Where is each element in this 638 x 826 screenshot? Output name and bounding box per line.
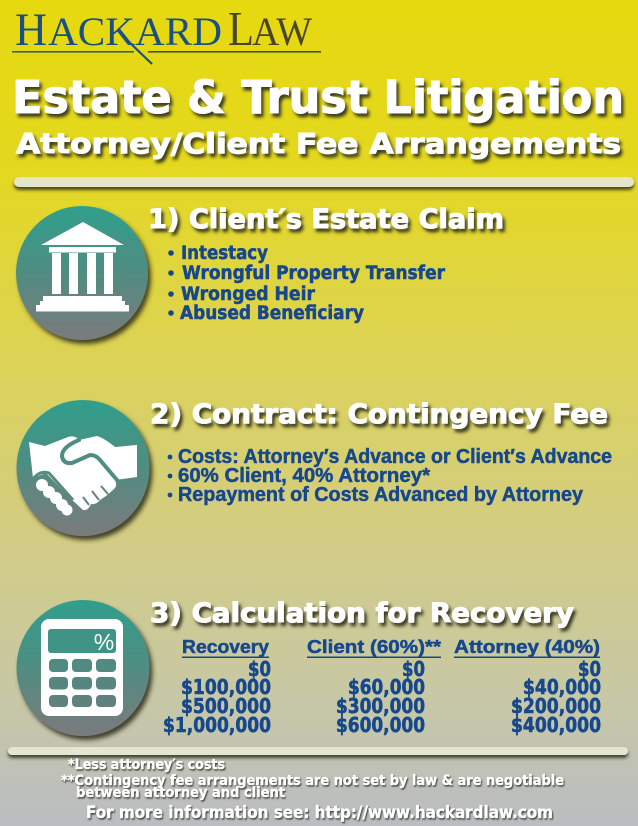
table: recovery column: $0: [248, 657, 271, 681]
table: attorney column: $400,000: [511, 713, 601, 737]
bullet list 2: [168, 446, 612, 506]
table: client column: $600,000: [336, 713, 425, 737]
table: recovery column: $500,000: [181, 694, 271, 718]
section 1: client's estate claim: [16, 204, 504, 340]
bullet list 2: 60% Client, 40% Attorney*: [178, 465, 430, 487]
table: client column: $60,000: [348, 675, 425, 699]
bullet list 1: Abused Beneficiary: [180, 303, 364, 324]
logo: Hackard Law: H: [15, 4, 47, 56]
bullet list 1: Intestacy: [181, 243, 268, 264]
table: recovery column: Recovery: [182, 636, 270, 657]
subtitle: Attorney/Client Fee Arrangements: [16, 127, 621, 160]
table: recovery column: $100,000: [181, 675, 271, 699]
table: attorney column: [454, 636, 601, 737]
footnotes: *Less attorney′s costs: [68, 757, 225, 773]
icon: calculator: %: [94, 629, 114, 655]
table: client column: $0: [402, 657, 425, 681]
table: recovery column: [163, 636, 271, 737]
icon: courthouse: [16, 206, 148, 340]
table: attorney column: $200,000: [511, 694, 601, 718]
title: Estate & Trust Litigation: [12, 71, 624, 124]
icon: handshake: [16, 400, 150, 536]
logo: Hackard Law: L: [228, 1, 254, 56]
top divider bar: [14, 177, 634, 187]
table: attorney column: Attorney (40%): [454, 636, 600, 657]
table: attorney column: $0: [578, 657, 601, 681]
logo: Hackard Law: ACKARD: [48, 9, 222, 54]
bullet list 2: Costs: Attorney′s Advance or Client′s Advance: [178, 446, 612, 468]
bullet list 2: Repayment of Costs Advanced by Attorney: [178, 484, 584, 506]
table: client column: Client (60%)**: [307, 636, 442, 657]
heading 3: 3) Calculation for Recovery: [150, 598, 574, 629]
heading 1: 1) Client′s Estate Claim: [148, 204, 504, 235]
bottom divider bar: [8, 747, 628, 755]
bullet list 1: Wronged Heir: [181, 284, 316, 305]
footnotes: [61, 757, 564, 801]
section 2: contract: [16, 399, 612, 536]
footnotes: **Contingency fee arrangements are not set by law & are negotiable: [61, 773, 564, 789]
more information line: For more information see: http://www.hackardlaw.com: [86, 803, 553, 822]
logo: Hackard Law: [12, 1, 321, 64]
bullet list 1: [168, 243, 446, 324]
table: recovery column: $1,000,000: [163, 713, 271, 737]
table: client column: [307, 636, 442, 737]
icon: calculator: [16, 600, 150, 736]
bullet list 1: Wrongful Property Transfer: [182, 263, 446, 284]
heading 2: 2) Contract: Contingency Fee: [150, 399, 608, 430]
table: client column: $300,000: [336, 694, 425, 718]
logo: Hackard Law: AW: [252, 9, 312, 54]
footnotes: between attorney and client: [76, 785, 285, 801]
section 3: calculation: [16, 598, 601, 737]
table: attorney column: $40,000: [523, 675, 601, 699]
